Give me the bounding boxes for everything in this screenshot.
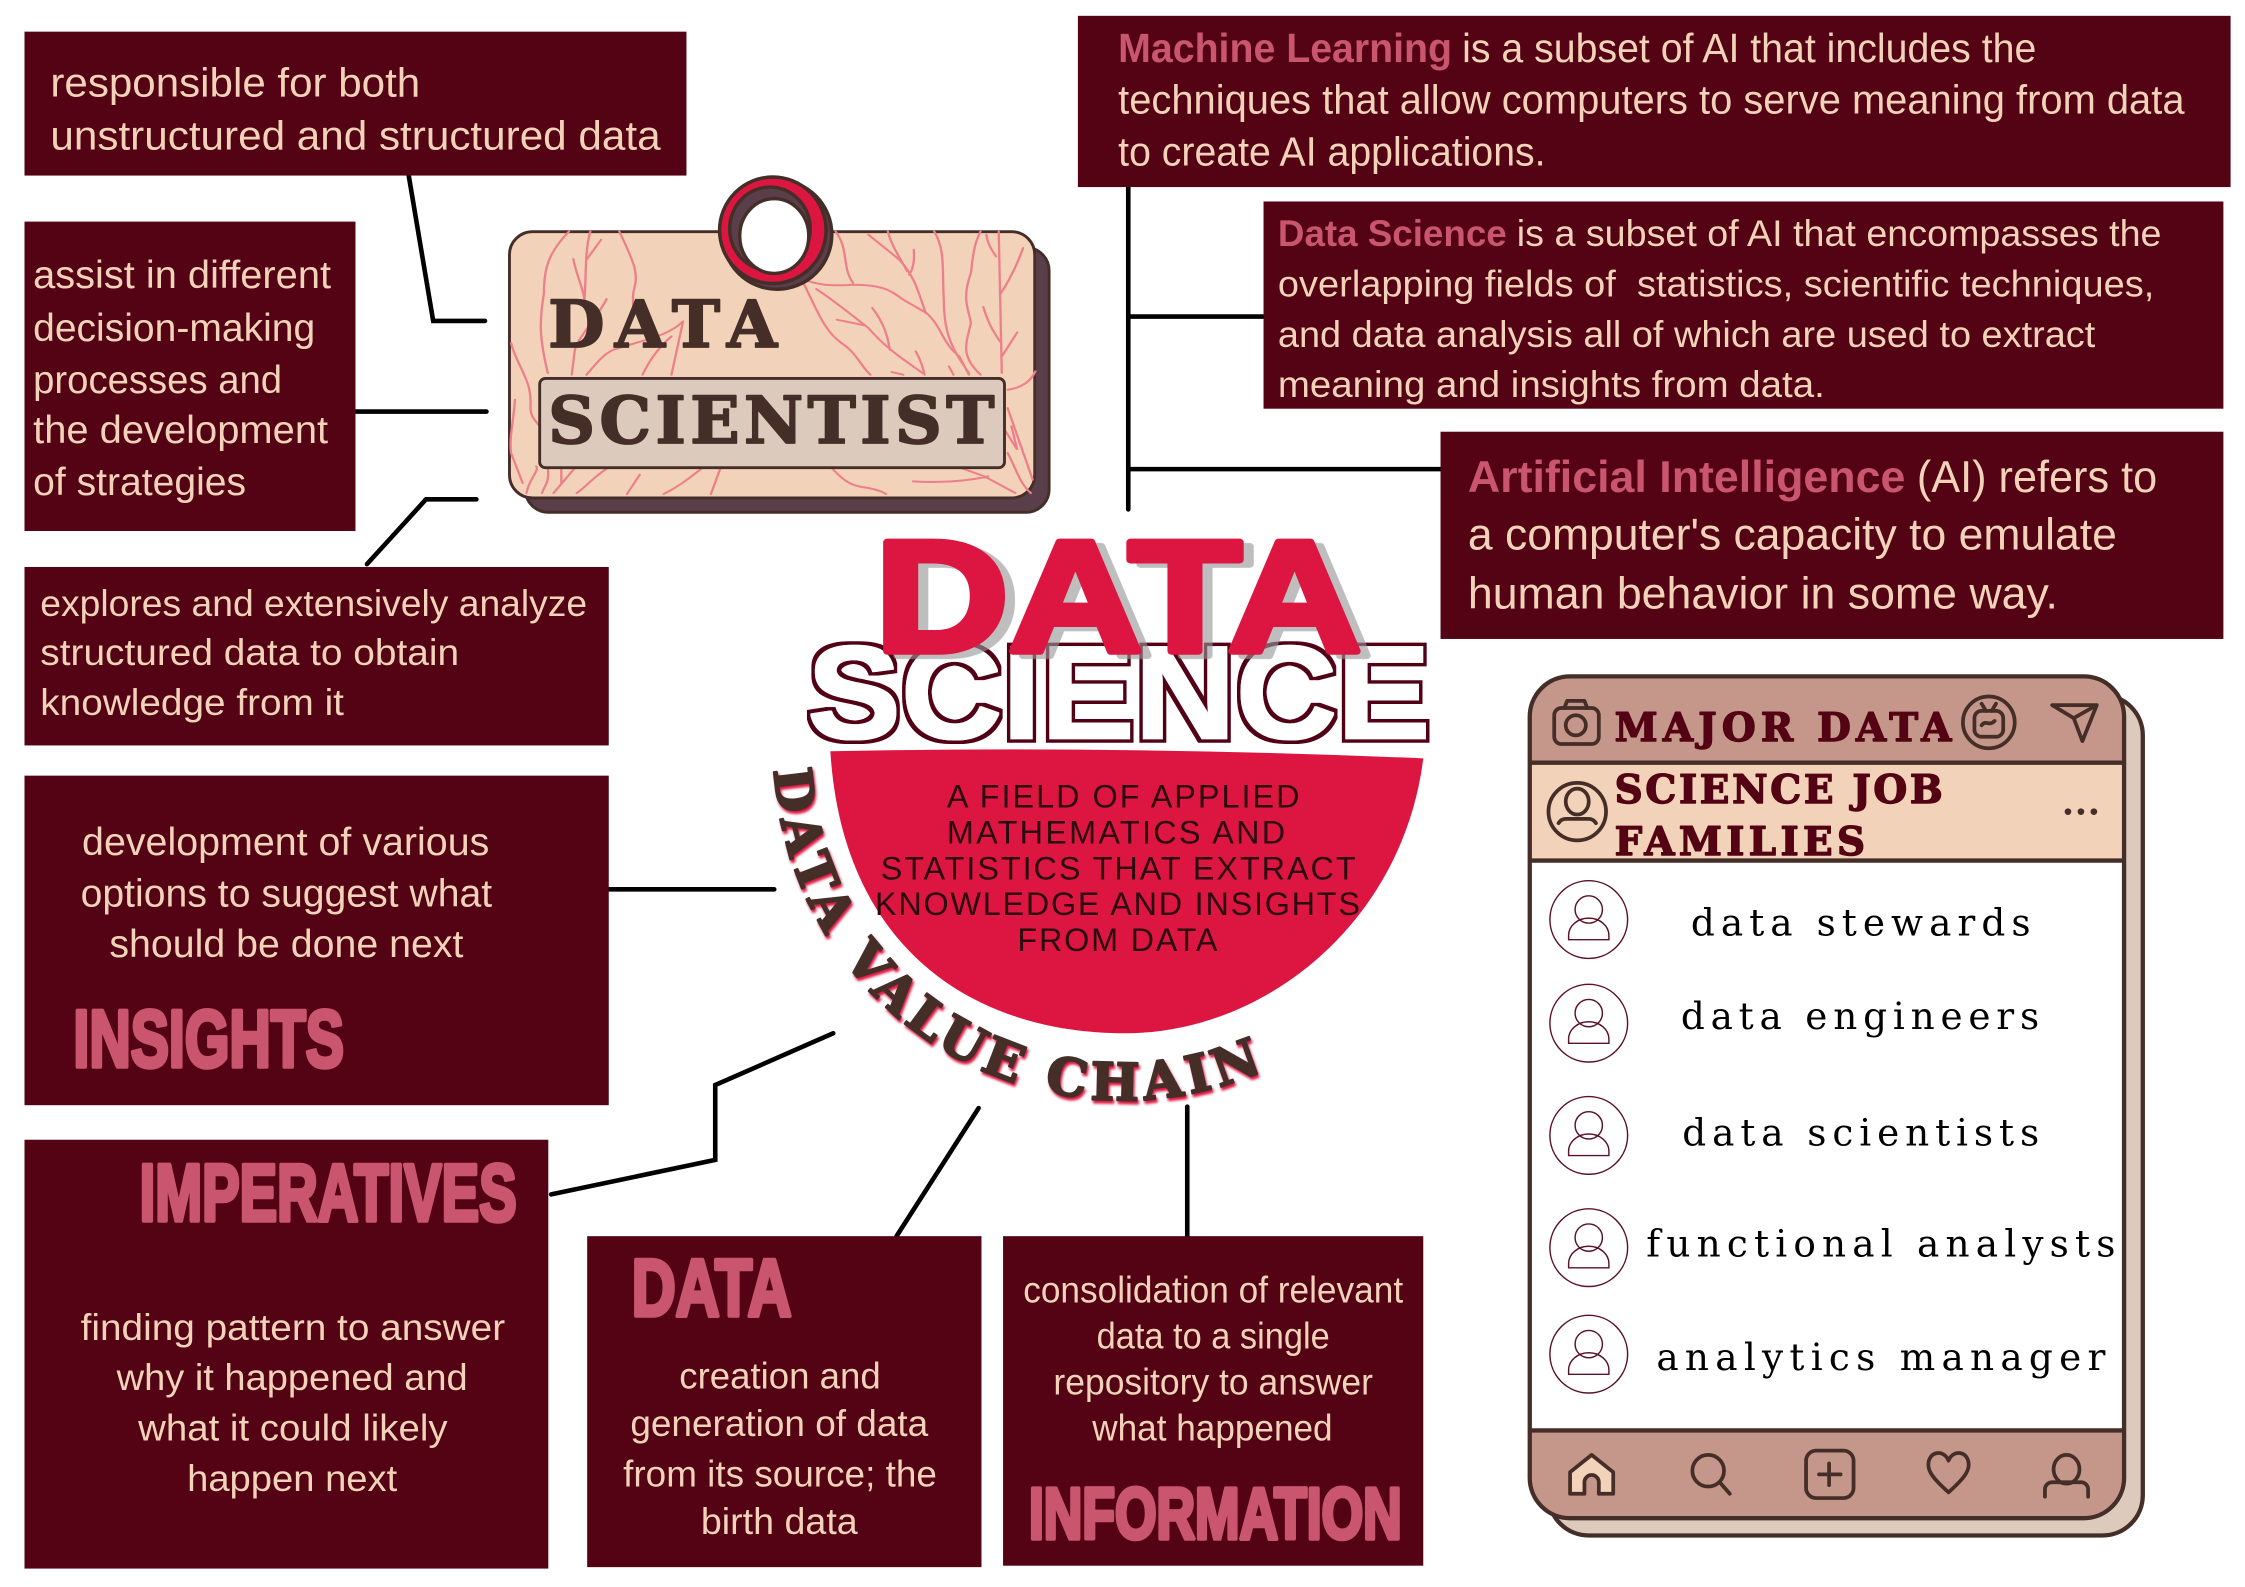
definition text: A FIELD OF APPLIED <box>947 778 1300 814</box>
panel: information: consolidation of relevant <box>1023 1269 1403 1310</box>
panel: decision-making: decision-making <box>33 307 315 350</box>
panel: machine learning: to create AI applications. <box>1118 128 1546 174</box>
definition text <box>875 778 1360 958</box>
panel: artificial intelligence <box>1441 432 2223 639</box>
connector: information <box>1186 1107 1189 1236</box>
heading: information: INFORMATION <box>1029 1474 1402 1554</box>
panel: data: birth data <box>701 1501 858 1542</box>
job: data scientists <box>1550 1097 2039 1174</box>
semicircle: definition of data science <box>830 749 1423 1033</box>
heading: imperatives: IMPERATIVES <box>140 1148 517 1238</box>
panel: data <box>587 1236 981 1567</box>
panel: explores structured data: explores and extensively analyze <box>40 582 587 624</box>
phone front screen <box>1530 676 2124 1518</box>
heading: data: DATA <box>548 287 778 363</box>
icon: heart <box>1928 1453 1969 1492</box>
connector: explores to badge <box>367 499 476 564</box>
title word: science: SCIENCE <box>807 619 1430 767</box>
panel: imperatives: happen next <box>187 1457 398 1499</box>
panel: data: generation of data <box>630 1403 929 1444</box>
icon: search <box>1692 1455 1730 1494</box>
heading: data: DATA <box>632 1243 792 1333</box>
panel: responsible for data: unstructured and structured data <box>50 113 661 159</box>
definition text: FROM DATA <box>1017 922 1218 958</box>
job: data stewards <box>1550 881 2031 958</box>
connector: decision-making to badge <box>355 410 486 413</box>
heading: insights: INSIGHTS <box>73 994 344 1084</box>
panel: decision-making: processes and <box>33 359 282 402</box>
curved label: data value chain: DATA VALUE CHAIN <box>772 766 1262 1107</box>
job: data scientists: data scientists <box>1682 1110 2039 1154</box>
panel: decision-making: assist in different <box>33 254 331 297</box>
panel: machine learning: techniques that allow computers to serve meaning from data <box>1118 77 2185 123</box>
phone top bar <box>1530 676 2124 763</box>
icon: user <box>2045 1455 2088 1497</box>
panel: artificial intelligence: Artificial Intelligence <box>1468 453 1905 502</box>
panel: explores structured data: knowledge from it <box>40 681 345 723</box>
phone back layer <box>1548 695 2143 1535</box>
title word: data: DATA <box>875 508 1361 685</box>
icon: add <box>1806 1451 1854 1498</box>
connector: insights <box>609 888 774 891</box>
panel: insights <box>24 776 609 1105</box>
panel: artificial intelligence: a computer's capacity to emulate <box>1468 511 2117 560</box>
panel: artificial intelligence: (AI) refers to <box>1917 453 2157 502</box>
panel: machine learning: Machine Learning <box>1118 25 1452 71</box>
panel: machine learning <box>1078 16 2231 187</box>
badge vein pattern <box>511 231 1035 494</box>
panel: responsible for data <box>24 32 686 176</box>
job: data engineers: data engineers <box>1681 994 2039 1038</box>
icon: camera <box>1554 701 1599 744</box>
panel: insights: development of various <box>82 821 489 864</box>
panel: decision-making: of strategies <box>33 461 246 504</box>
heading: science job families <box>1615 768 1943 865</box>
panel: decision-making <box>24 222 355 531</box>
panel: data science definition: meaning and insights from data. <box>1278 363 1825 405</box>
connector: imperatives <box>551 1033 833 1194</box>
job: functional analysts: functional analysts <box>1646 1221 2115 1265</box>
phone card: major data science job families <box>1530 676 2143 1535</box>
heading: scientist: SCIENTIST <box>548 383 994 459</box>
panel: data science definition: is a subset of AI that encompasses the <box>1517 212 2162 254</box>
panel: data: from its source; the <box>623 1454 937 1495</box>
icon: more dots <box>2065 808 2097 815</box>
definition text: STATISTICS THAT EXTRACT <box>881 850 1356 886</box>
connector: data <box>897 1108 979 1236</box>
panel: machine learning: is a subset of AI that includes the <box>1462 25 2036 71</box>
panel: imperatives: finding pattern to answer <box>81 1306 505 1348</box>
panel: insights: options to suggest what <box>81 873 492 916</box>
heading: science job families: FAMILIES <box>1615 820 1865 865</box>
panel: insights: should be done next <box>109 923 464 966</box>
panel: information <box>1003 1236 1423 1566</box>
definition text: KNOWLEDGE AND INSIGHTS <box>875 886 1360 922</box>
panel: imperatives: why it happened and <box>116 1356 468 1398</box>
panel: artificial intelligence: human behavior in some way. <box>1468 570 2058 619</box>
phone outline <box>1530 676 2124 1518</box>
definition text: MATHEMATICS AND <box>947 814 1285 850</box>
name plate <box>540 378 1004 468</box>
connector: responsible to badge <box>409 176 485 321</box>
panel: data science definition: and data analysis all of which are used to extract <box>1278 313 2096 355</box>
icon: tv <box>1963 697 2015 748</box>
panel: data science definition: overlapping fields of statistics, scientific techniques, <box>1278 262 2154 304</box>
badge shadow <box>525 248 1049 512</box>
heading: major data: MAJOR DATA <box>1615 706 1952 751</box>
badge body <box>509 232 1035 498</box>
job: functional analysts <box>1550 1209 2115 1287</box>
job: data engineers <box>1550 984 2039 1062</box>
panel: data science definition: Data Science <box>1278 212 1507 254</box>
panel: decision-making: the development <box>33 409 328 452</box>
panel: explores structured data: structured data to obtain <box>40 631 459 673</box>
panel: responsible for data: responsible for both <box>50 59 420 105</box>
phone profile bar <box>1530 763 2124 861</box>
panel: imperatives <box>24 1140 548 1569</box>
badge: data scientist <box>509 177 1049 512</box>
badge ring <box>720 177 832 289</box>
panel: information: repository to answer <box>1053 1361 1373 1402</box>
job: analytics manager <box>1550 1315 2105 1393</box>
panel: explores structured data <box>24 567 609 745</box>
heading: science job families: SCIENCE JOB <box>1615 768 1943 813</box>
panel: information: data to a single <box>1097 1315 1330 1356</box>
panel: data science definition <box>1264 201 2223 409</box>
job: analytics manager: analytics manager <box>1656 1335 2105 1379</box>
connector: definitions spine <box>1128 187 1441 509</box>
icon: send <box>2052 705 2097 741</box>
panel: data: creation and <box>679 1356 881 1397</box>
phone bottom bar <box>1530 1430 2124 1518</box>
panel: imperatives: what it could likely <box>137 1407 448 1449</box>
panel: information: what happened <box>1091 1408 1333 1449</box>
job: data stewards: data stewards <box>1691 900 2031 944</box>
icon: profile <box>1548 783 1606 840</box>
icon: home <box>1570 1455 1613 1494</box>
title: data science <box>807 508 1430 767</box>
